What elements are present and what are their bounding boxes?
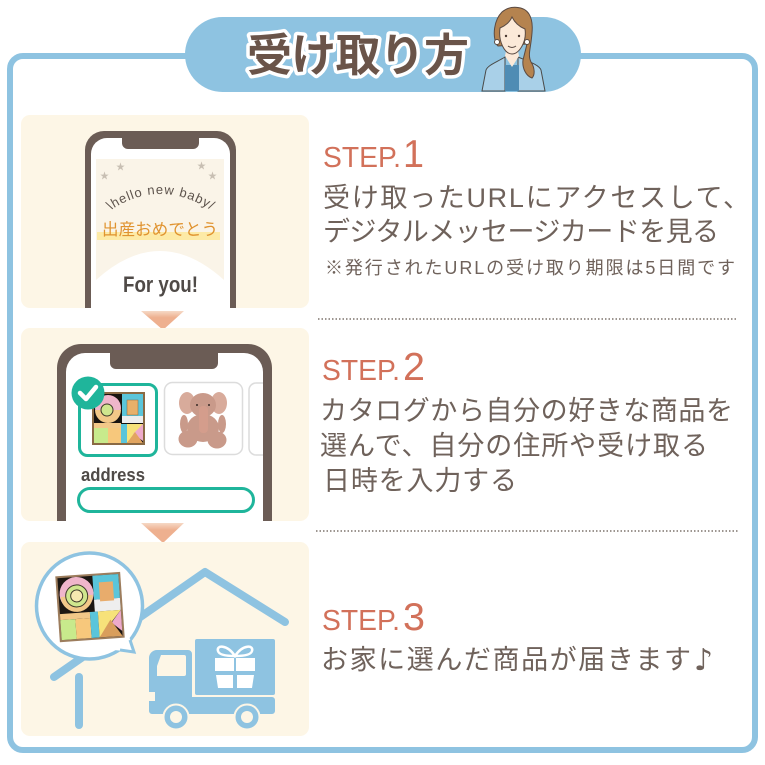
arrow 2 xyxy=(141,523,184,543)
panel: step 3 illustration xyxy=(21,542,309,736)
step 1 body: ※発行されたURLの受け取り期限は5日間です xyxy=(325,258,735,278)
step 2 label: 2 xyxy=(403,346,425,389)
step 1 label: 1 xyxy=(403,133,424,176)
step 3 text xyxy=(321,596,713,678)
step 2 body: カタログから自分の好きな商品を xyxy=(320,396,733,426)
step 1 body xyxy=(323,183,750,278)
stars: ★ xyxy=(208,171,217,181)
step 3 body: ♪ xyxy=(694,643,713,678)
icon: house xyxy=(54,572,285,725)
icon: phone xyxy=(57,344,272,521)
congratulations text: 出産おめでとう xyxy=(102,220,218,239)
stars: ★ xyxy=(116,162,125,172)
title: 受け取り方 xyxy=(247,30,469,81)
stars: ★ xyxy=(100,171,109,181)
step 2 body xyxy=(320,396,733,496)
blocks toy xyxy=(55,572,125,642)
address label: address xyxy=(81,465,145,485)
speech bubble with toy xyxy=(36,553,142,659)
step 2 body: 選んで、自分の住所や受け取る xyxy=(320,431,708,461)
panel: step 1 illustration xyxy=(21,115,309,308)
icon: delivery truck xyxy=(149,639,275,730)
highlight band xyxy=(97,232,220,240)
icon: woman xyxy=(482,7,545,91)
step 1 label: STEP. xyxy=(323,142,401,174)
step 1 body: 受け取ったURLにアクセスして、 xyxy=(323,183,750,213)
arrow 1 xyxy=(141,311,184,330)
step 2 label xyxy=(322,346,425,389)
step 3 label: STEP. xyxy=(322,605,400,637)
step 1 label xyxy=(323,133,424,176)
icon: gift xyxy=(215,647,255,688)
blocks toy xyxy=(92,392,145,445)
for you: For you! xyxy=(123,272,198,297)
step 3 body: お家に選んだ商品が届きます xyxy=(321,645,691,675)
step 2 text xyxy=(320,346,733,496)
address input xyxy=(78,488,254,512)
step 1 text xyxy=(323,133,750,278)
header pill xyxy=(185,7,581,92)
elephant xyxy=(178,392,227,448)
icon: phone xyxy=(85,131,236,308)
stars: ★ xyxy=(197,161,206,171)
panel: step 2 illustration xyxy=(21,328,309,521)
step 3 label xyxy=(322,596,425,639)
elephant product xyxy=(164,382,242,454)
hello new baby: \hello new baby/ xyxy=(105,187,216,210)
stars xyxy=(100,161,217,181)
step 2 body: 日時を入力する xyxy=(323,466,517,496)
step 3 label: 3 xyxy=(403,596,425,639)
step 2 label: STEP. xyxy=(322,355,400,387)
next product edge xyxy=(249,383,263,455)
check badge xyxy=(72,376,104,410)
selected product xyxy=(72,376,156,456)
wheels xyxy=(164,704,188,730)
step 1 body: デジタルメッセージカードを見る xyxy=(323,217,719,247)
